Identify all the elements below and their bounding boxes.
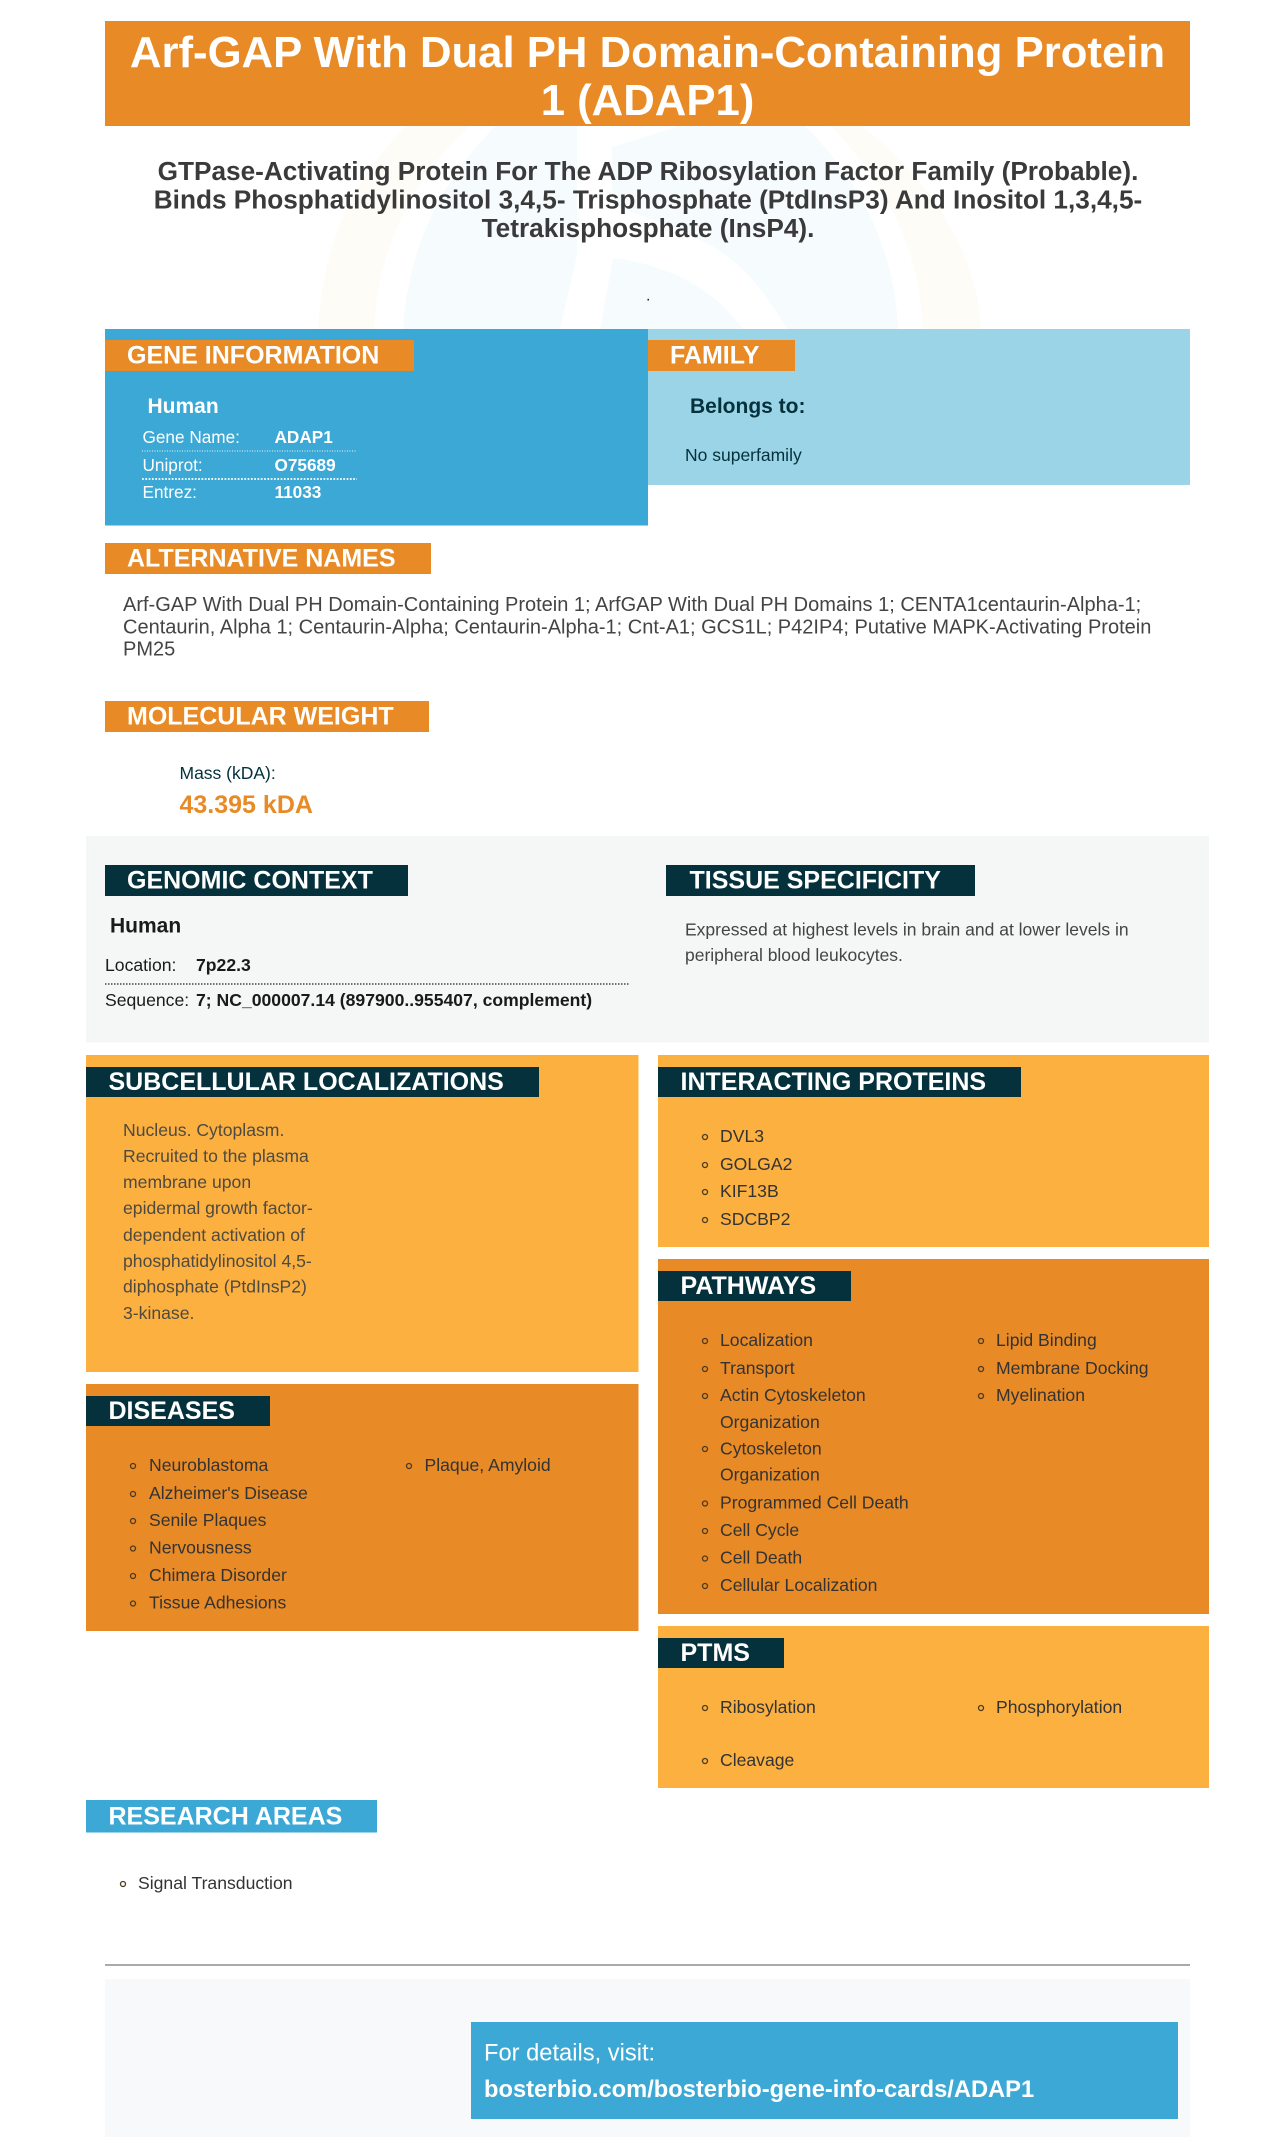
family text: No superfamily bbox=[685, 445, 802, 465]
gene information table: Entrez: bbox=[142, 482, 197, 502]
heading: pathways bbox=[658, 1271, 851, 1301]
heading: alternative names: ALTERNATIVE NAMES bbox=[127, 544, 396, 572]
gene information table: Gene Name: bbox=[142, 427, 240, 447]
subcellular text: Recruited to the plasma bbox=[123, 1146, 309, 1166]
pathways list: Transport bbox=[720, 1358, 795, 1378]
background watermark logo bbox=[318, 126, 981, 329]
subtitle description: Binds Phosphatidylinositol 3,4,5- Trisphosphate (PtdInsP3) And Inositol 1,3,4,5- bbox=[154, 184, 1142, 214]
gene information table: O75689 bbox=[274, 455, 336, 475]
alternative names text: Arf-GAP With Dual PH Domain-Containing Protein 1; ArfGAP With Dual PH Domains 1; CENTA1centaurin-Alpha-1; bbox=[123, 594, 1141, 616]
ptms list: Phosphorylation bbox=[996, 1697, 1122, 1717]
title banner bbox=[105, 21, 1190, 126]
heading: ptms: PTMS bbox=[680, 1639, 750, 1667]
diseases list: Chimera Disorder bbox=[149, 1565, 287, 1585]
callout: visit details: For details, visit: bbox=[484, 2040, 655, 2066]
pathways list: Localization bbox=[720, 1330, 813, 1350]
tissue specificity text: peripheral blood leukocytes. bbox=[685, 945, 903, 965]
heading: genomic context: GENOMIC CONTEXT bbox=[127, 866, 373, 894]
heading: family bbox=[648, 340, 795, 371]
panel: subcellular localizations bbox=[86, 1055, 638, 1372]
ptms list bbox=[702, 1697, 1122, 1770]
gene information table: ADAP1 bbox=[274, 427, 333, 447]
subcellular text: epidermal growth factor- bbox=[123, 1198, 313, 1218]
interacting proteins list bbox=[702, 1126, 792, 1229]
tissue specificity text: Expressed at highest levels in brain and at lower levels in bbox=[685, 920, 1129, 940]
diseases list: Alzheimer's Disease bbox=[149, 1483, 308, 1503]
pathways list: Organization bbox=[720, 1412, 820, 1432]
diseases list: Neuroblastoma bbox=[149, 1455, 269, 1475]
subcellular text bbox=[123, 1120, 313, 1323]
pathways list: Lipid Binding bbox=[996, 1330, 1097, 1350]
pathways list: Membrane Docking bbox=[996, 1358, 1149, 1378]
title banner: Arf-GAP With Dual PH Domain-Containing Protein bbox=[130, 28, 1165, 77]
heading: family: FAMILY bbox=[670, 342, 760, 370]
heading: molecular weight: MOLECULAR WEIGHT bbox=[127, 702, 394, 730]
panel: ptms bbox=[658, 1626, 1209, 1788]
heading: interacting proteins: INTERACTING PROTEINS bbox=[680, 1068, 986, 1096]
genomic context data: Location: bbox=[105, 955, 176, 975]
diseases list: Tissue Adhesions bbox=[149, 1592, 286, 1612]
heading: research areas bbox=[86, 1800, 377, 1832]
heading: research areas: RESEARCH AREAS bbox=[108, 1802, 342, 1830]
gene information table: 11033 bbox=[274, 482, 321, 502]
genomic context data: 7; NC_000007.14 (897900..955407, complement) bbox=[196, 990, 592, 1010]
panel: footer bbox=[105, 1979, 1190, 2137]
callout: visit details: bosterbio.com/bosterbio-gene-info-cards/ADAP1 bbox=[484, 2077, 1034, 2103]
pathways list: Cell Death bbox=[720, 1548, 802, 1568]
title banner: 1 (ADAP1) bbox=[541, 76, 754, 125]
heading: diseases: DISEASES bbox=[108, 1397, 235, 1425]
heading: tissue specificity: TISSUE SPECIFICITY bbox=[690, 866, 941, 894]
molecular weight value bbox=[180, 763, 313, 819]
gene information table: Uniprot: bbox=[142, 455, 203, 475]
alternative names text: PM25 bbox=[123, 638, 175, 660]
panel: family bbox=[648, 329, 1190, 485]
diseases list: Plaque, Amyloid bbox=[424, 1455, 551, 1475]
panel: diseases bbox=[86, 1384, 638, 1631]
genomic context data: Sequence: bbox=[105, 990, 189, 1010]
genomic context data bbox=[105, 914, 629, 1010]
subcellular text: 3-kinase. bbox=[123, 1303, 194, 1323]
alternative names text bbox=[123, 594, 1151, 660]
subcellular text: Nucleus. Cytoplasm. bbox=[123, 1120, 284, 1140]
diseases list: Senile Plaques bbox=[149, 1510, 267, 1530]
research areas list: Signal Transduction bbox=[138, 1873, 293, 1893]
pathways list: Organization bbox=[720, 1464, 820, 1484]
heading: pathways: PATHWAYS bbox=[680, 1272, 816, 1300]
pathways list: Programmed Cell Death bbox=[720, 1492, 909, 1512]
family text bbox=[685, 395, 806, 465]
molecular weight value: Mass (kDA): bbox=[180, 763, 276, 783]
pathways list: Actin Cytoskeleton bbox=[720, 1385, 866, 1405]
interacting proteins list: KIF13B bbox=[720, 1181, 779, 1201]
subcellular text: diphosphate (PtdInsP2) bbox=[123, 1276, 307, 1296]
panel: genomic context and tissue specificity bbox=[86, 836, 1209, 1042]
interacting proteins list: GOLGA2 bbox=[720, 1154, 792, 1174]
gene information table: Human bbox=[148, 395, 219, 418]
gene information table bbox=[142, 395, 357, 502]
pathways list bbox=[702, 1330, 1149, 1595]
small dot text: . bbox=[646, 288, 650, 304]
callout: visit details bbox=[471, 2022, 1178, 2119]
pathways list: Cell Cycle bbox=[720, 1520, 799, 1540]
pathways list: Cellular Localization bbox=[720, 1575, 877, 1595]
interacting proteins list: DVL3 bbox=[720, 1126, 764, 1146]
family text: Belongs to: bbox=[690, 395, 806, 418]
interacting proteins list: SDCBP2 bbox=[720, 1209, 790, 1229]
molecular weight value: 43.395 kDA bbox=[180, 791, 313, 819]
diseases list bbox=[130, 1455, 551, 1612]
ptms list: Cleavage bbox=[720, 1750, 794, 1770]
subcellular text: membrane upon bbox=[123, 1172, 251, 1192]
subtitle description: Tetrakisphosphate (InsP4). bbox=[482, 213, 814, 243]
panel: pathways bbox=[658, 1259, 1209, 1614]
genomic context data: 7p22.3 bbox=[196, 955, 251, 975]
subtitle description: GTPase-Activating Protein For The ADP Ribosylation Factor Family (Probable). bbox=[158, 156, 1138, 186]
alternative names text: Centaurin, Alpha 1; Centaurin-Alpha; Centaurin-Alpha-1; Cnt-A1; GCS1L; P42IP4; Putative MAPK-Activating Protein bbox=[123, 616, 1151, 638]
heading: diseases bbox=[86, 1396, 270, 1426]
heading: ptms bbox=[658, 1638, 784, 1668]
subcellular text: dependent activation of bbox=[123, 1225, 305, 1245]
panel: gene information bbox=[105, 329, 648, 526]
tissue specificity text bbox=[685, 920, 1129, 965]
subtitle description bbox=[154, 156, 1142, 243]
pathways list: Myelination bbox=[996, 1385, 1085, 1405]
subcellular text: phosphatidylinositol 4,5- bbox=[123, 1251, 312, 1271]
diseases list: Nervousness bbox=[149, 1538, 252, 1558]
genomic context data: Human bbox=[110, 914, 181, 938]
ptms list: Ribosylation bbox=[720, 1697, 816, 1717]
panel: interacting proteins bbox=[658, 1055, 1209, 1247]
heading: gene information: GENE INFORMATION bbox=[127, 342, 379, 370]
pathways list: Cytoskeleton bbox=[720, 1438, 822, 1458]
heading: subcellular localizations: SUBCELLULAR LOCALIZATIONS bbox=[108, 1068, 504, 1096]
